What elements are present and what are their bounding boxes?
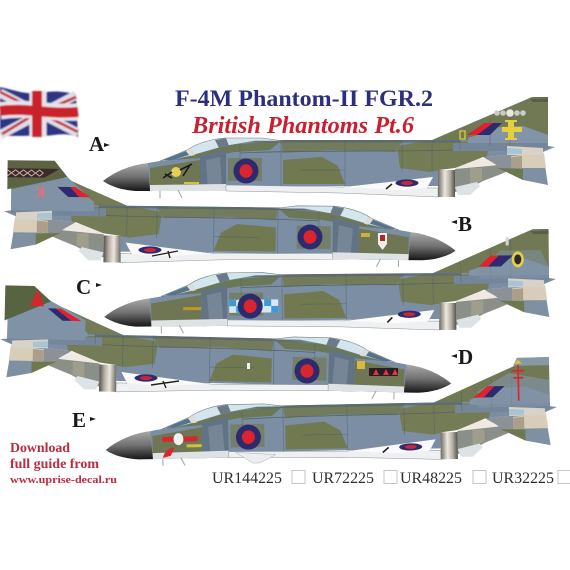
title: British Phantoms Pt.6	[191, 113, 414, 139]
product codes with checkboxes: UR72225	[312, 470, 374, 487]
jet D	[0, 285, 453, 401]
variant label D: D	[458, 345, 473, 369]
flag: Union Jack	[0, 87, 78, 137]
product codes with checkboxes: UR32225	[492, 470, 554, 487]
product codes with checkboxes	[212, 470, 570, 487]
download note	[10, 440, 117, 486]
jet C	[104, 229, 556, 334]
variant label A: A	[89, 132, 105, 156]
download note: Download	[10, 440, 71, 455]
product codes with checkboxes: UR48225	[400, 470, 462, 487]
jet B	[3, 160, 457, 268]
variant label E: E	[72, 408, 86, 432]
variant label B	[451, 212, 472, 236]
variant label C	[76, 275, 102, 299]
download note: www.uprise-decal.ru	[10, 474, 117, 486]
jet A	[103, 97, 555, 198]
variant label D	[451, 345, 473, 369]
download note: full guide from	[10, 456, 100, 471]
title: F-4M Phantom-II FGR.2	[175, 86, 433, 111]
variant label C: C	[76, 275, 91, 299]
variant label E	[72, 408, 96, 432]
title	[175, 86, 433, 139]
variant label B: B	[458, 212, 472, 236]
jet E	[104, 357, 558, 467]
product codes with checkboxes: UR144225	[212, 470, 282, 487]
